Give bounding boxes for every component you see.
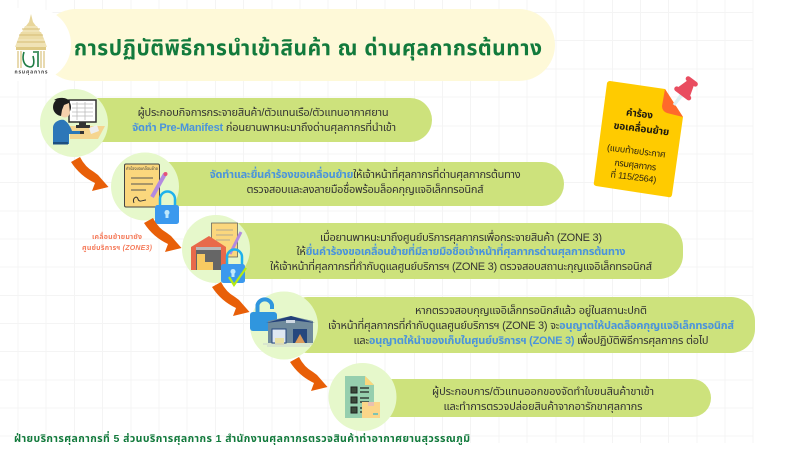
pushpin <box>666 73 701 111</box>
step 1 panel <box>74 98 432 142</box>
step 2 icon: signed form and lock: คำร้องขอเคลื่อนย้าย <box>126 165 159 171</box>
logo: customs department: กรมศุลกากร <box>14 70 48 76</box>
step 3 text: ให้เจ้าหน้าที่ศุลกากรที่กำกับดูแลศูนย์บริการฯ (ZONE 3) ตรวจสอบสถานะกุญแจอิเล็กทรอนิกส์ <box>270 258 652 273</box>
step 2 icon: signed form and lock <box>111 152 179 224</box>
arrow 1 <box>71 157 108 191</box>
step 5 text: และทำการตรวจปล่อยสินค้าจากอารักขาศุลกากร <box>444 400 642 413</box>
step 1 text: จัดทำ Pre-Manifest ก่อนยานพาหนะมาถึงด่านศุลกากรที่นำเข้า <box>132 119 396 134</box>
note reference: ที่ 115/2564) <box>610 167 657 185</box>
step 4 text: เจ้าหน้าที่ศุลกากรที่กำกับดูแลศูนย์บริการฯ (ZONE 3) จะอนุญาตให้ปลดล็อคกุญแจอิเล็กทรอนิกส์ <box>328 317 734 332</box>
step 3 text <box>270 229 652 273</box>
label: moved to service center <box>82 231 153 252</box>
step 5 text <box>432 386 654 413</box>
step 4 icon: open lock and warehouse <box>250 292 318 360</box>
step 2 text: ตรวจสอบและลงลายมือชื่อพร้อมล็อคกุญแจอิเล็กทรอนิกส์ <box>246 181 484 196</box>
note reference: กรมศุลกากร <box>614 158 657 173</box>
arrow 3 <box>212 282 250 316</box>
note heading: ขอเคลื่อนย้าย <box>613 118 670 138</box>
step 3 text: เมื่อยานพาหนะมาถึงศูนย์บริการศุลกากรเพื่อกระจายสินค้า (ZONE 3) <box>320 229 602 244</box>
note: movement request form <box>594 73 701 197</box>
step 1 text <box>132 107 396 134</box>
step 5 text: ผู้ประกอบการ/ตัวแทนออกของจัดทำใบขนสินค้าขาเข้า <box>432 386 654 398</box>
title: การปฏิบัติพิธีการนำเข้าสินค้า ณ ด่านศุลกากรต้นทาง <box>74 37 542 61</box>
step 2 text: จัดทำและยื่นคำร้องขอเคลื่อนย้ายให้เจ้าหน้าที่ศุลกากรที่ด่านศุลกากรต้นทาง <box>210 166 521 181</box>
label: moved to service center: เคลื่อนย้ายมายัง <box>92 231 142 241</box>
step 1 icon: operator at computer <box>40 89 108 157</box>
logo: customs department <box>0 8 71 81</box>
note reference <box>606 142 667 185</box>
step 5 icon: checklist and parcel <box>328 363 396 431</box>
footer: ฝ่ายบริการศุลกากรที่ 5 ส่วนบริการศุลกากร 1 สำนักงานศุลกากรตรวจสินค้าท่าอากาศยานสุวรรณภูมิ <box>14 431 470 445</box>
step 3 icon: warehouse, form, lock and check <box>182 215 250 285</box>
step 4 panel <box>284 297 755 353</box>
step 3 text: ให้ยื่นคำร้องขอเคลื่อนย้ายที่มีลายมือชื่อเจ้าหน้าที่ศุลกากรด่านศุลกากรต้นทาง <box>296 243 626 258</box>
step 1 text: ผู้ประกอบกิจการกระจายสินค้า/ตัวแทนเรือ/ตัวแทนอากาศยาน <box>138 107 389 119</box>
arrow 4 <box>290 357 328 391</box>
label: moved to service center: ศูนย์บริการฯ (ZONE3) <box>82 244 153 252</box>
step 5 panel <box>362 379 711 417</box>
note reference: (แบบท้ายประกาศ <box>606 142 667 160</box>
step 2 panel <box>145 162 564 206</box>
arrow 2 <box>144 218 182 252</box>
step 4 text: และอนุญาตให้นำของเก็บในศูนย์บริการฯ (ZONE 3) เพื่อปฏิบัติพิธีการศุลกากร ต่อไป <box>354 332 708 347</box>
note heading <box>613 105 670 138</box>
step 2 text <box>210 166 521 196</box>
step 3 panel <box>216 223 683 279</box>
title banner <box>40 9 555 81</box>
step 4 text: หากตรวจสอบกุญแจอิเล็กทรอนิกส์แล้ว อยู่ในสถานะปกติ <box>415 304 647 317</box>
note heading: คำร้อง <box>625 105 654 122</box>
step 4 text <box>328 304 734 347</box>
